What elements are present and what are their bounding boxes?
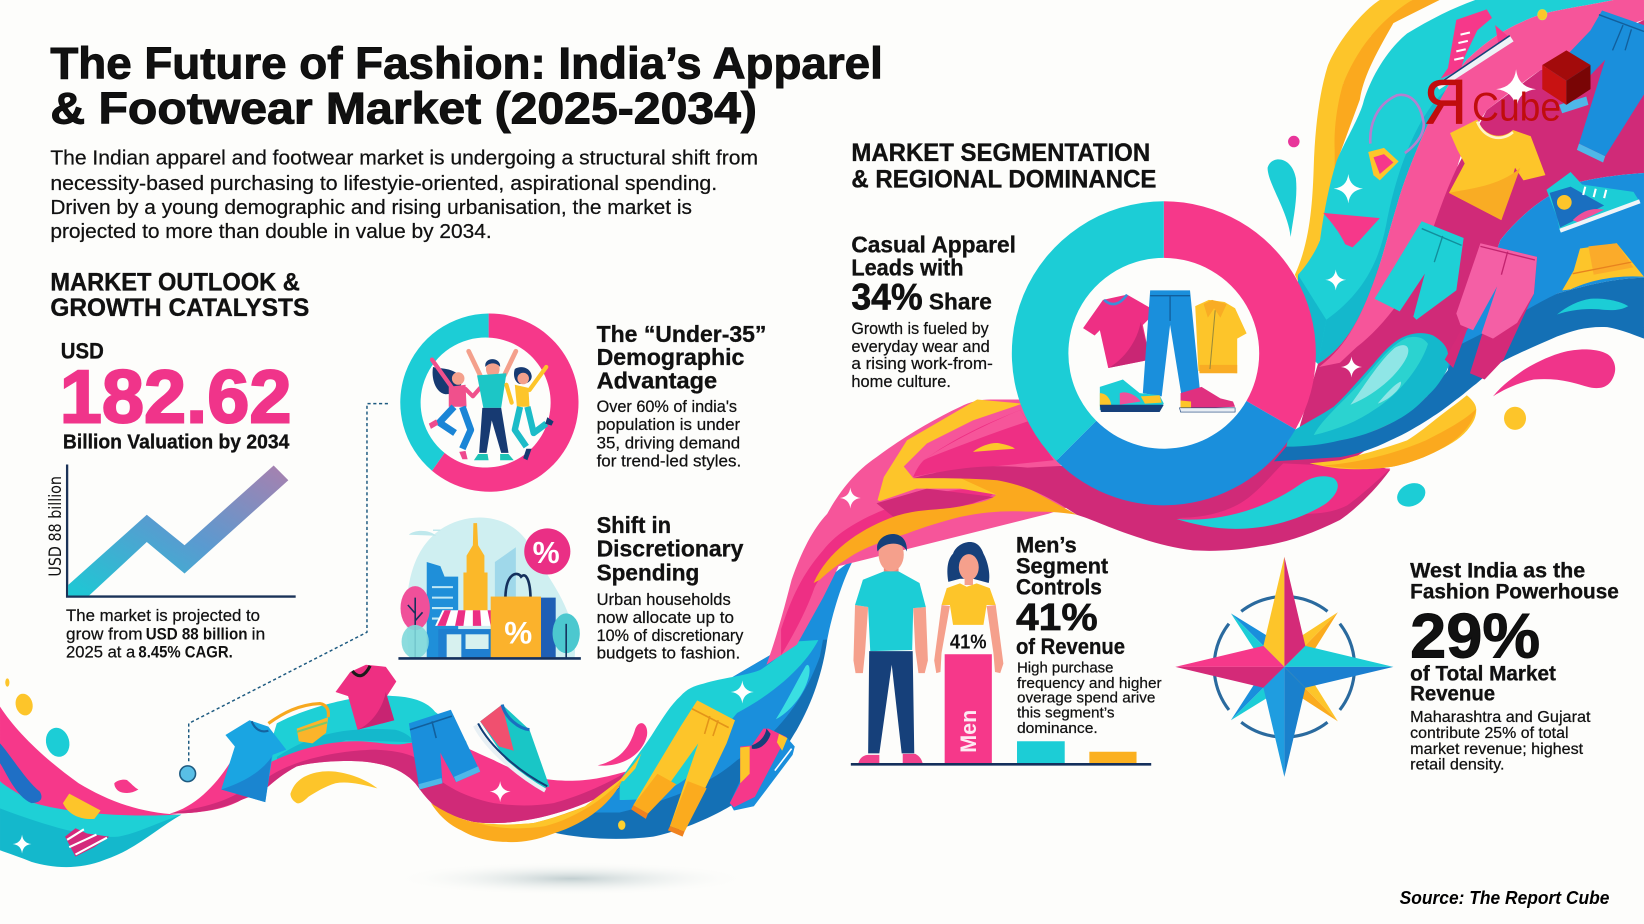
text: under-35: Advantage: [597, 367, 717, 393]
text: men's segment: overage spend arive: [1017, 689, 1155, 706]
centre man: [469, 351, 516, 460]
text: west india: Maharashtra and Gujarat: [1410, 709, 1591, 726]
text: under-35: Demographic: [597, 344, 745, 370]
intro paragraph: Driven by a young demographic and rising urbanisation, the market is: [50, 196, 692, 219]
text: under-35: [597, 321, 766, 471]
garment: blue jeans: [1546, 10, 1644, 163]
intro paragraph: necessity-based purchasing to lifestyie-oriented, aspirational spending.: [50, 172, 717, 195]
right sneaker: [1180, 387, 1235, 412]
title: & Footwear Market (2025-2034): [50, 85, 757, 134]
yellow tower: [463, 523, 488, 619]
text: casual apparel: everyday wear and: [851, 337, 990, 356]
chart caption: 2025 at a: [66, 642, 136, 661]
text: west india: 29%: [1410, 601, 1540, 671]
garment: teal shorts: [1375, 221, 1464, 320]
garment: handbag: [268, 704, 328, 743]
stat: valuation: USD: [61, 339, 104, 364]
icon: outfit: [1083, 290, 1247, 412]
percent badge: %: [533, 536, 560, 570]
heading: market outlook: MARKET OUTLOOK &: [50, 268, 300, 296]
garment: teal running shoe: [475, 705, 549, 791]
blue jeans: [1143, 290, 1200, 396]
percent badge: [524, 528, 570, 575]
logo: RCube: Я: [1424, 68, 1467, 138]
icon: city and shopping: [398, 517, 581, 658]
sparkles: [13, 69, 1536, 853]
text: casual apparel: a rising work-from-: [851, 354, 993, 373]
garment: blue jeans: [409, 710, 480, 789]
logo: RCube: Cube: [1472, 86, 1561, 130]
text: west india: [1410, 560, 1619, 774]
text: discretionary spending: Urban households: [597, 590, 731, 609]
text: west india: Revenue: [1410, 682, 1495, 705]
donut: casual apparel share: [1012, 201, 1316, 505]
shopping bag: %: [504, 616, 532, 651]
text: discretionary spending: 10% of discretionary: [597, 626, 744, 645]
text: discretionary spending: now allocate up to: [597, 608, 734, 627]
flowing ribbon: bottom left: [0, 707, 181, 867]
shop: [435, 610, 495, 658]
garment: teal sneaker: [1546, 172, 1640, 232]
pink t-shirt: [1083, 295, 1156, 368]
teal trees: [402, 613, 580, 658]
text: west india: retail density.: [1410, 757, 1505, 774]
line chart: [45, 464, 296, 597]
text: casual apparel: Growth is fueled by: [851, 319, 989, 338]
blue bag back: [540, 598, 556, 657]
title: The Future of Fashion: India’s Apparel: [50, 40, 883, 89]
text: west india: Fashion Powerhouse: [1410, 581, 1619, 604]
text: casual apparel: [851, 232, 1016, 391]
garment: pink pants: [1445, 243, 1537, 380]
text: under-35: population is under: [597, 415, 741, 434]
heading: market segmentation: MARKET SEGMENTATION: [851, 139, 1150, 167]
text: discretionary spending: Shift in: [597, 512, 671, 538]
chart caption: 8.45% CAGR.: [138, 642, 233, 661]
right woman: [506, 367, 554, 460]
text: casual apparel: home culture.: [851, 372, 951, 391]
text: men's segment: Men’s: [1016, 533, 1077, 558]
heading: market segmentation: [851, 139, 1156, 194]
text: west india: market revenue; highest: [1410, 741, 1584, 758]
text: casual apparel: Leads with: [851, 255, 964, 281]
bar chart: gender revenue: 41%: [950, 631, 987, 653]
chart caption: grow from: [66, 625, 143, 644]
text: discretionary spending: Discretionary: [597, 536, 744, 562]
garment: yellow trousers: [631, 700, 735, 837]
text: discretionary spending: budgets to fashion.: [597, 643, 740, 662]
text: casual apparel: Share: [929, 288, 992, 314]
text: west india: contribute 25% of total: [1410, 725, 1568, 742]
line chart: USD 88 billion: [45, 476, 65, 577]
yellow shirt: [1195, 300, 1247, 373]
garment: pink briefs: [1323, 213, 1380, 247]
figure: man: [853, 534, 928, 763]
stat: valuation: 182.62: [60, 355, 291, 439]
left woman: [429, 360, 480, 459]
chart caption: in: [252, 625, 265, 644]
intro paragraph: projected to more than double in value by 2034.: [50, 220, 492, 243]
text: under-35: Over 60% of india's: [597, 397, 737, 416]
pink tree: [401, 586, 430, 658]
logo: RCube: [1424, 50, 1591, 138]
text: under-35: The “Under-35”: [597, 321, 766, 347]
text: men's segment: Controls: [1016, 574, 1102, 599]
shopping bag: [491, 574, 541, 657]
text: discretionary spending: [597, 512, 744, 662]
necklace pendant: [1368, 95, 1424, 180]
icon: three jumping people: [429, 351, 554, 460]
text: casual apparel: 34%: [851, 276, 923, 317]
text: west india: of Total Market: [1410, 662, 1556, 685]
title: [50, 40, 883, 134]
flowing ribbon: upper right: [1274, 0, 1644, 469]
dashed leader line: [180, 404, 388, 782]
garment: blue tee: [221, 720, 286, 802]
garment: pink sneaker: [730, 729, 795, 810]
text: men's segment: frequency and higher: [1017, 675, 1162, 692]
heading: market outlook: GROWTH CATALYSTS: [50, 294, 309, 322]
text: men's segment: 41%: [1016, 596, 1098, 638]
text: men's segment: High purchase: [1017, 660, 1113, 677]
text: casual apparel: Casual Apparel: [851, 232, 1016, 258]
text: discretionary spending: Spending: [597, 559, 699, 585]
source credit: Source: The Report Cube: [1400, 887, 1609, 908]
chart caption: [66, 606, 265, 661]
blue tower: [427, 562, 458, 658]
text: men's segment: this segment’s: [1017, 705, 1115, 722]
chart caption: USD 88 billion: [146, 625, 247, 644]
garment: pink tee: [336, 665, 396, 730]
text: men's segment: dominance.: [1017, 720, 1098, 737]
text: men's segment: [1016, 533, 1162, 737]
flowing ribbon: centre swoosh: [766, 399, 1390, 665]
heading: market segmentation: & REGIONAL DOMINANCE: [851, 166, 1156, 194]
bar chart: gender revenue: Men: [956, 710, 981, 753]
chart caption: The market is projected to: [66, 606, 260, 625]
left sneaker: [1100, 380, 1164, 412]
logo cube: [1542, 50, 1591, 105]
garment: pink high-top sneaker: [1437, 9, 1512, 87]
ground shadow: [393, 862, 750, 895]
text: west india: West India as the: [1410, 560, 1585, 583]
figure: woman: [934, 542, 1003, 673]
icon: striped heart: [65, 828, 109, 857]
garment: yellow tee: [1449, 120, 1545, 220]
icon: compass star: [1175, 557, 1393, 777]
text: under-35: 35, driving demand: [597, 434, 740, 453]
pale tower: [495, 547, 516, 619]
bar chart: gender revenue: [851, 631, 1151, 764]
garment: yellow hat: [1562, 243, 1644, 290]
intro paragraph: [50, 147, 758, 243]
intro paragraph: The Indian apparel and footwear market is undergoing a structural shift from: [50, 147, 758, 170]
text: men's segment: of Revenue: [1016, 634, 1125, 659]
donut: under-35: [400, 313, 579, 492]
heading: market outlook: [50, 268, 309, 322]
flowing ribbon: bottom centre: [170, 634, 827, 842]
stat: valuation: Billion Valuation by 2034: [63, 432, 289, 454]
text: men's segment: Segment: [1016, 554, 1109, 579]
text: under-35: for trend-led styles.: [597, 452, 741, 471]
